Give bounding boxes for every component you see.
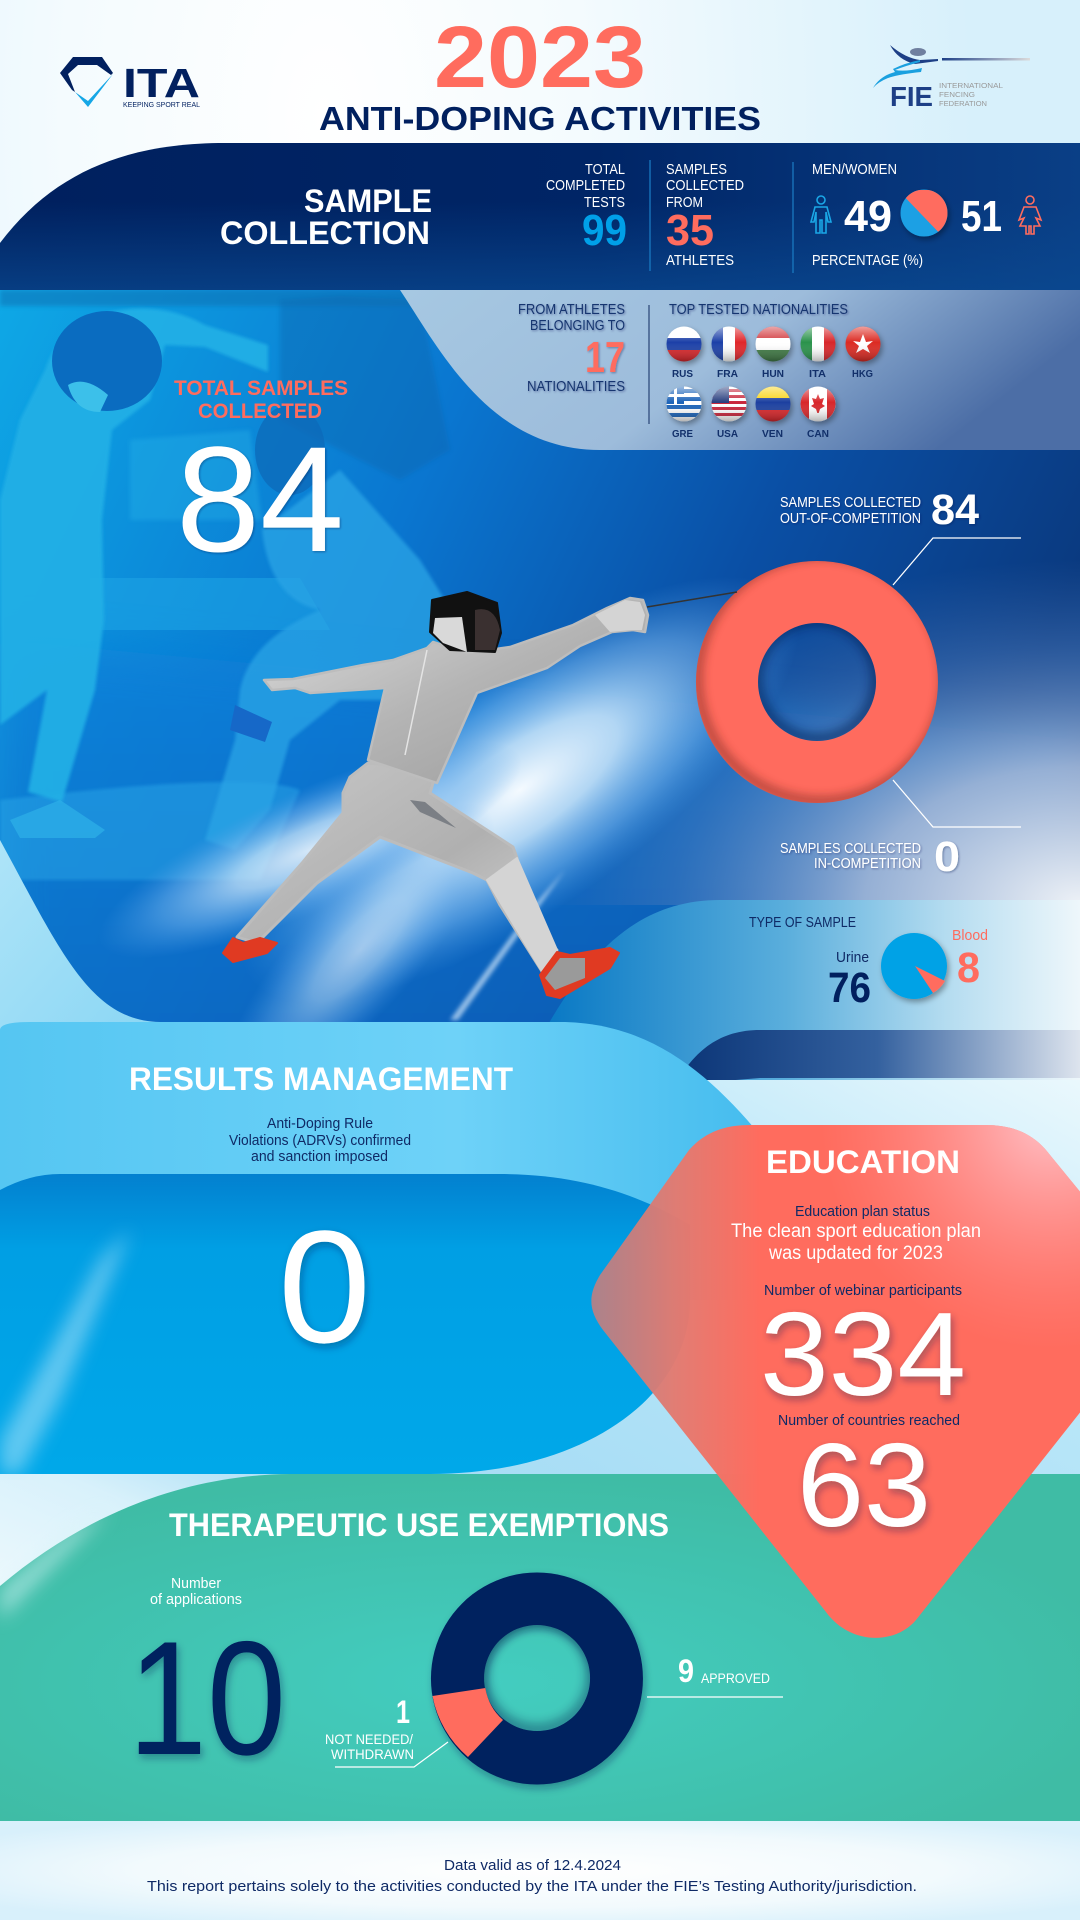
- label: not needed: [325, 1694, 448, 1767]
- panel: type of sample: 8: [957, 944, 980, 992]
- panel: education: [591, 1125, 1080, 1638]
- flags: [666, 326, 880, 440]
- panel: nationalities: [400, 290, 1080, 450]
- flag labels: ITA: [809, 368, 826, 380]
- stat: men women percentage: PERCENTAGE (%): [812, 253, 923, 269]
- stat: nationalities count: BELONGING TO: [530, 318, 625, 334]
- stat: out-of-competition: SAMPLES COLLECTED: [780, 495, 921, 511]
- mask: [430, 592, 501, 652]
- gloss: [666, 326, 702, 362]
- footer: Data valid as of 12.4.2024: [444, 1857, 621, 1874]
- stat: samples collected from athletes: SAMPLES: [666, 162, 727, 178]
- flag: Venezuela: [755, 386, 791, 422]
- logo: FIE: INTERNATIONAL: [939, 81, 1003, 90]
- label: approved: 9: [678, 1653, 694, 1689]
- text: ADRV description: Anti-Doping Rule: [267, 1116, 373, 1132]
- footer: [0, 1821, 1080, 1920]
- stat: ADRVs zero: 0: [278, 1197, 371, 1376]
- heading: sample collection: COLLECTION: [220, 215, 430, 251]
- stat: men women percentage: MEN/WOMEN: [812, 162, 897, 178]
- stat: men women percentage: 51: [961, 192, 1002, 241]
- stat: countries reached: Number of countries reached: [778, 1413, 960, 1429]
- title: 2023: 2023: [434, 9, 646, 106]
- stat: in-competition: 0: [934, 833, 960, 881]
- panel: therapeutic use exemptions: [0, 1474, 1080, 1821]
- stat: out-of-competition: OUT-OF-COMPETITION: [780, 511, 921, 527]
- subtitle: anti-doping activities: ANTI-DOPING ACTIVITIES: [319, 100, 761, 137]
- flag labels: VEN: [762, 428, 783, 440]
- panel: type of sample: TYPE OF SAMPLE: [749, 915, 856, 931]
- flag: Russia: [666, 326, 702, 362]
- logo: FIE: [873, 45, 1030, 112]
- flag labels: USA: [717, 428, 738, 440]
- icon: gender pie: [898, 190, 950, 240]
- jacket: [264, 598, 648, 783]
- fencer figure: [223, 592, 737, 998]
- panel: type of sample: [545, 900, 1080, 1085]
- stat: total completed tests: 99: [582, 206, 627, 255]
- text: ADRV description: and sanction imposed: [251, 1149, 388, 1165]
- flag: Italy: [800, 326, 836, 362]
- flag labels: RUS: [672, 368, 693, 380]
- panel: pale lower-left shape: [0, 840, 160, 1030]
- donut chart: samples collected: [696, 555, 944, 803]
- stat: samples collected from athletes: FROM: [666, 195, 703, 211]
- panel: therapeutic use exemptions: 10: [128, 1608, 286, 1789]
- stat: samples collected from athletes: COLLECTED: [666, 178, 744, 194]
- panel: results management: [0, 1022, 760, 1474]
- icon: woman: [1019, 196, 1041, 234]
- pie chart: sample types: [881, 933, 947, 999]
- text: ADRV description: Violations (ADRVs) confirmed: [229, 1133, 411, 1149]
- pants: [237, 763, 557, 973]
- label: not needed: NOT NEEDED/: [325, 1731, 413, 1747]
- mid background: [0, 1080, 1080, 1604]
- logo: ITA: [60, 57, 200, 109]
- flag labels: FRA: [717, 368, 738, 380]
- ghost fencer left: [0, 309, 268, 802]
- stat: out-of-competition: 84: [931, 486, 979, 534]
- panel: photo background: [0, 290, 1080, 1022]
- panel: education: The clean sport education plan: [731, 1221, 981, 1242]
- text: ADRV description: [229, 1116, 411, 1165]
- logo: ITA: ITA: [123, 60, 200, 106]
- ghosted arena and fencers: [0, 290, 470, 880]
- flag: Canada: [800, 386, 836, 422]
- label: approved: [647, 1653, 783, 1697]
- stat: total samples collected: TOTAL SAMPLES: [174, 377, 348, 400]
- stat: total completed tests: [546, 162, 627, 255]
- text: plan status: Education plan status: [795, 1204, 930, 1220]
- stat: out-of-competition: [780, 486, 979, 534]
- stat: nationalities count: FROM ATHLETES: [518, 302, 625, 318]
- stat: webinar participants: Number of webinar participants: [764, 1283, 962, 1299]
- ghost fencer right: [255, 405, 325, 495]
- flag labels: HUN: [762, 368, 784, 380]
- stat: men women percentage: [811, 162, 1041, 269]
- icon: man: [811, 196, 831, 233]
- stat: applications: Number: [171, 1576, 221, 1592]
- panel: sample collection header: [0, 143, 1080, 290]
- heading: sample collection: SAMPLE: [304, 183, 432, 219]
- panel: type of sample: Urine: [836, 950, 869, 966]
- panel: type of sample: Blood: [952, 928, 988, 944]
- stat: samples collected from athletes: [666, 162, 744, 269]
- heading: top tested nationalities: TOP TESTED NATIONALITIES: [669, 302, 848, 318]
- flag labels: [672, 368, 873, 440]
- stat: in-competition: IN-COMPETITION: [814, 856, 921, 872]
- label: not needed: WITHDRAWN: [331, 1746, 414, 1762]
- heading: TUE: THERAPEUTIC USE EXEMPTIONS: [169, 1507, 669, 1543]
- panel: education: 334: [760, 1288, 966, 1421]
- stat: in-competition: SAMPLES COLLECTED: [780, 841, 921, 857]
- panel: education: was updated for 2023: [768, 1243, 943, 1264]
- label: not needed: 1: [396, 1694, 410, 1730]
- flag: USA: [711, 386, 747, 422]
- light rays: [114, 589, 783, 1022]
- shoes: [223, 938, 277, 962]
- label: approved: APPROVED: [701, 1670, 770, 1686]
- heading: education: EDUCATION: [766, 1144, 960, 1180]
- panel: education: 63: [797, 1419, 931, 1552]
- flag labels: GRE: [672, 428, 693, 440]
- heading: sample collection: [220, 183, 432, 251]
- logo: FIE: FEDERATION: [939, 99, 987, 108]
- stat: men women percentage: 49: [844, 192, 892, 241]
- stat: in-competition: [780, 833, 960, 881]
- stat: samples collected from athletes: ATHLETES: [666, 253, 734, 269]
- stat: applications: of applications: [150, 1592, 242, 1608]
- donut chart: TUE: [431, 1572, 643, 1784]
- flag: Hungary: [755, 326, 791, 362]
- stat: nationalities count: NATIONALITIES: [527, 379, 625, 395]
- stat: total completed tests: TOTAL: [585, 162, 625, 178]
- stat: nationalities count: 17: [585, 333, 625, 382]
- flag labels: CAN: [807, 428, 829, 440]
- flag: Hong Kong: [846, 326, 880, 362]
- flag: Greece: [666, 386, 702, 422]
- heading: results management: RESULTS MANAGEMENT: [129, 1061, 513, 1097]
- stat: applications: [150, 1576, 242, 1608]
- logo: FIE: FIE: [890, 81, 933, 112]
- logo: FIE: FENCING: [939, 90, 975, 99]
- flag labels: HKG: [852, 368, 873, 380]
- footer: This report pertains solely to the activities conducted by the ITA under the FIE’s Testing Authority/jurisdiction.: [147, 1878, 917, 1895]
- stat: total completed tests: COMPLETED: [546, 178, 625, 194]
- stat: samples collected from athletes: 35: [666, 206, 714, 255]
- flag: France: [711, 326, 747, 362]
- logo: ITA: KEEPING SPORT REAL: [123, 100, 200, 109]
- panel: type of sample: 76: [828, 964, 871, 1012]
- stat: nationalities count: [518, 302, 625, 395]
- callout lines: [893, 538, 1021, 827]
- stat: total samples collected: 84: [176, 415, 344, 583]
- stat: total completed tests: TESTS: [584, 195, 625, 211]
- stat: total samples collected: COLLECTED: [198, 400, 322, 423]
